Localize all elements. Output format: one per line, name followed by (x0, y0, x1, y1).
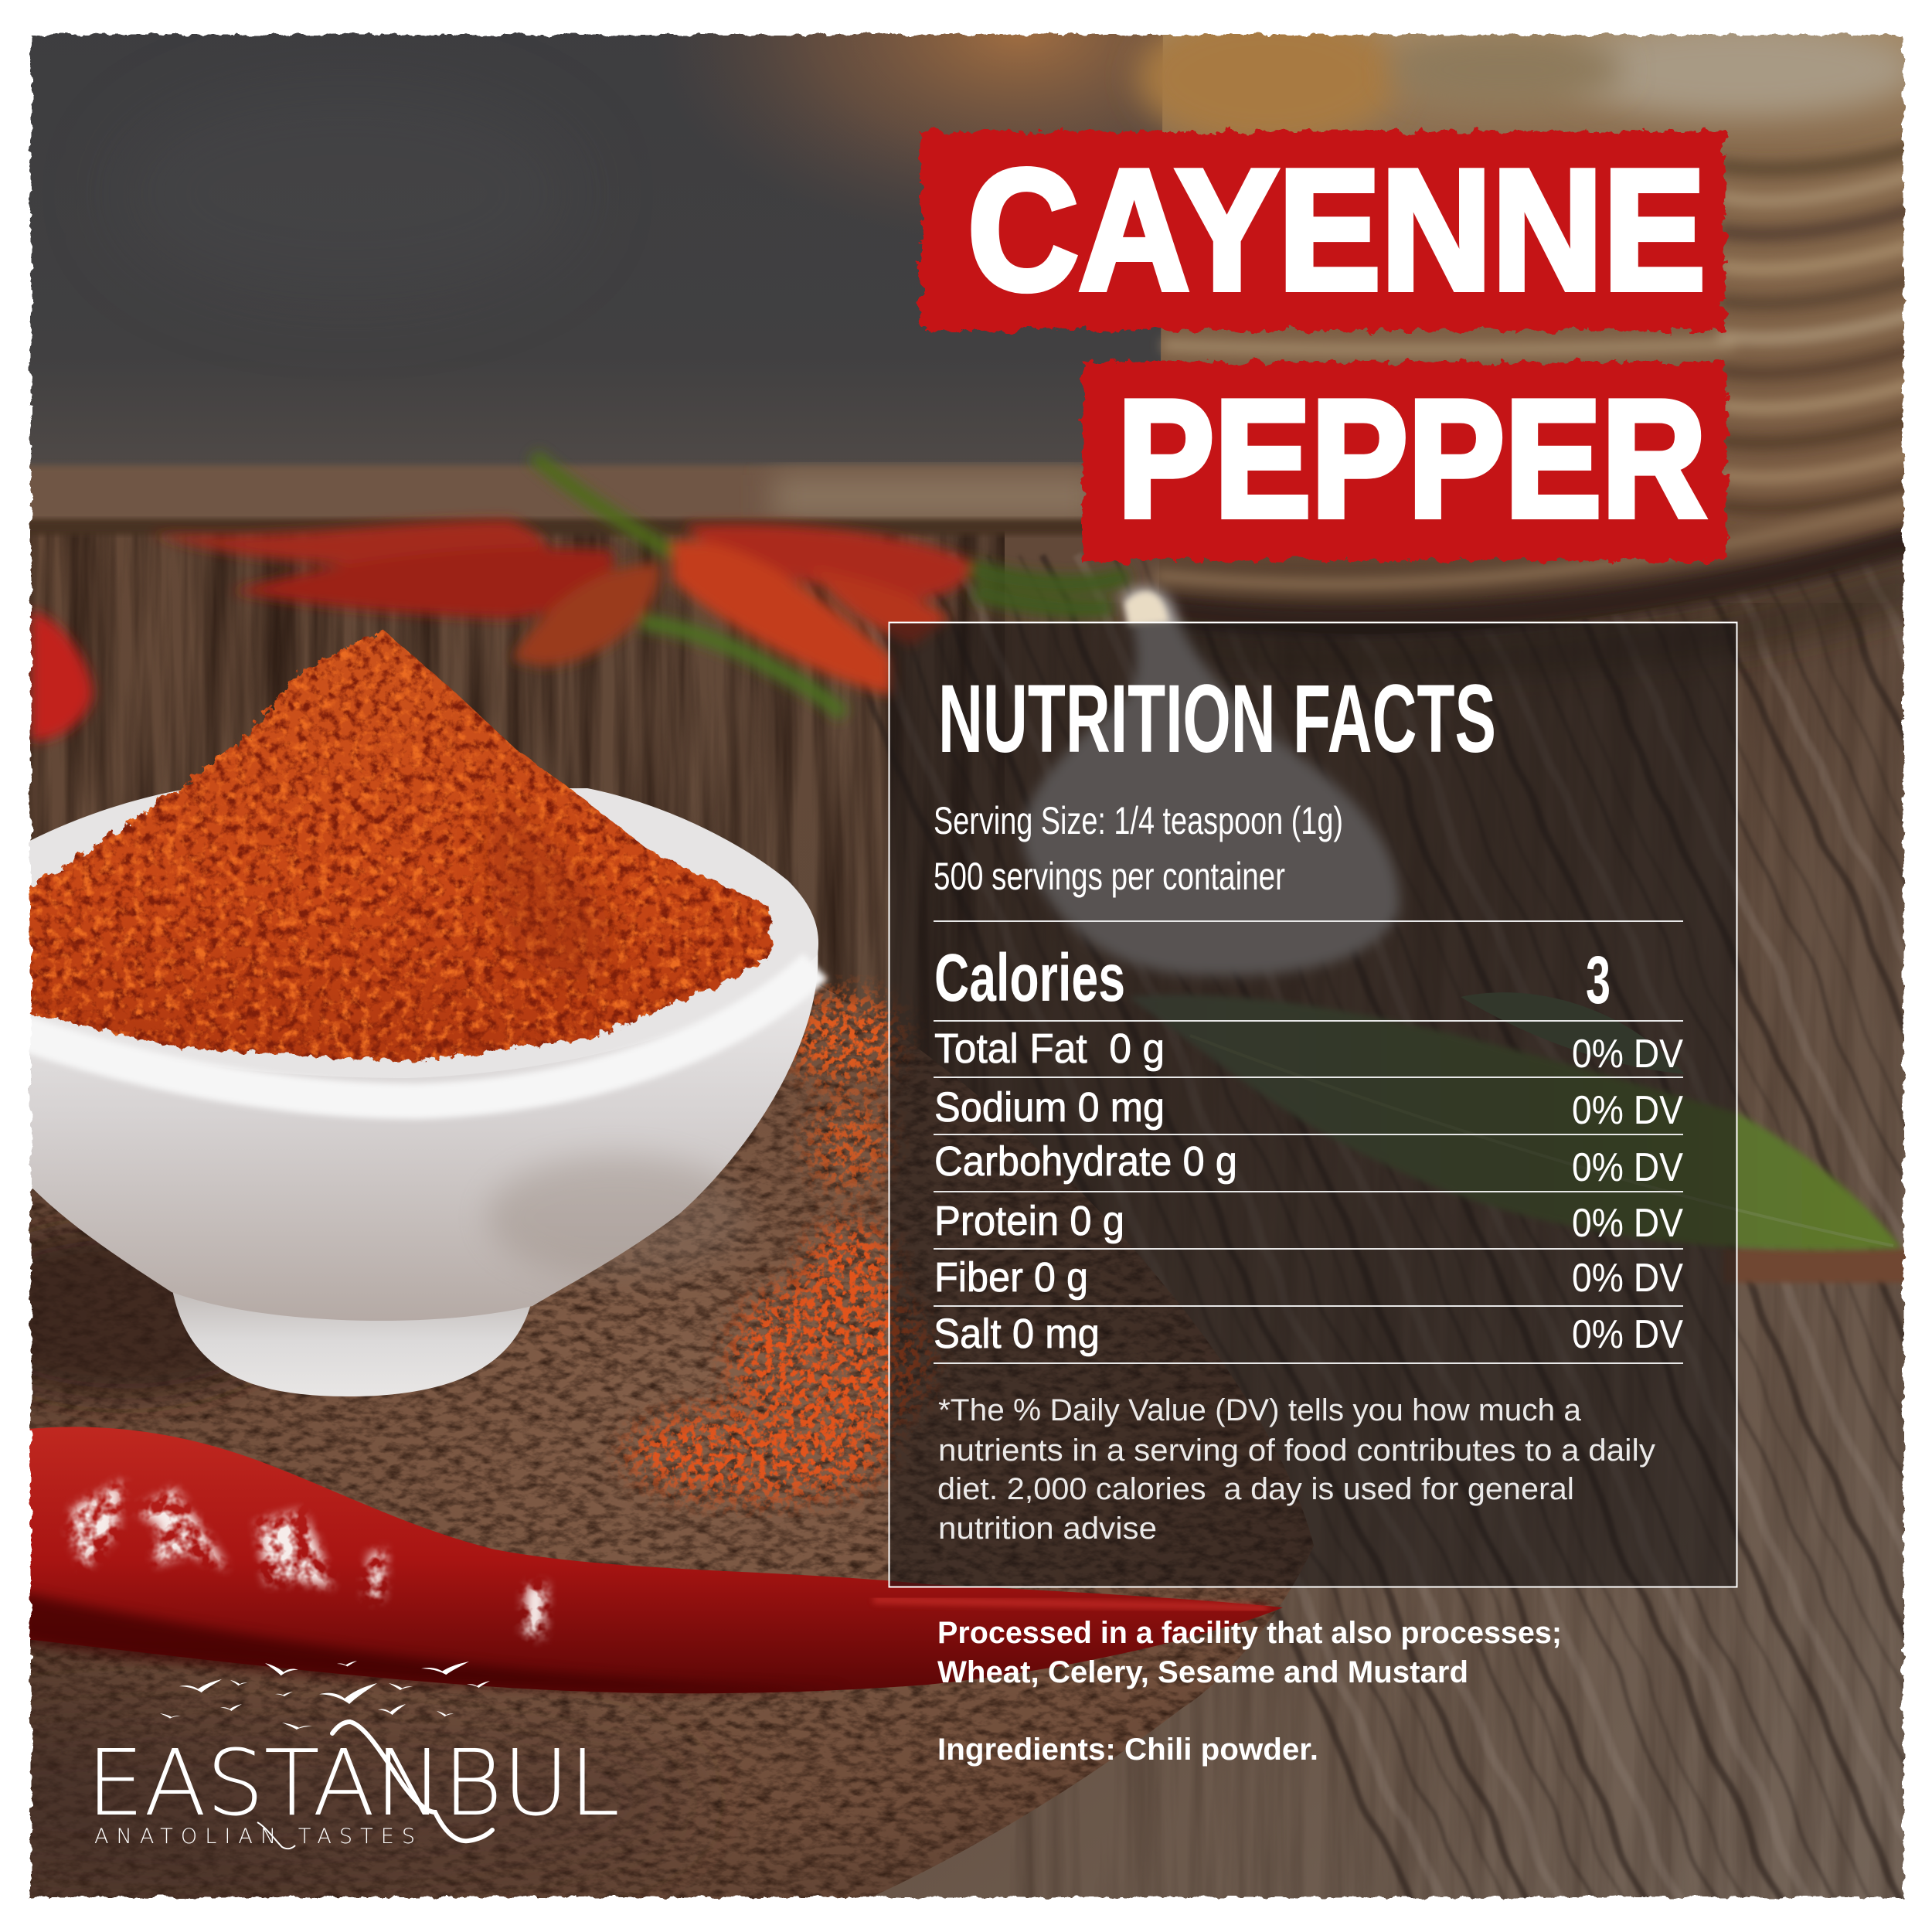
daily value footnote (937, 1393, 1655, 1546)
tagline swash (257, 1822, 295, 1849)
serving text (934, 799, 1343, 898)
wooden board (0, 980, 1314, 1909)
allergen and ingredients text (937, 1616, 1562, 1767)
nutrient rows: Salt 0 mg (934, 1311, 1100, 1357)
title: pepper: PEPPER (1117, 365, 1706, 552)
slate wall (0, 0, 1391, 475)
allergen and ingredients text: Ingredients: Chili powder. (937, 1733, 1318, 1767)
table wood (0, 495, 1932, 1932)
allergen and ingredients text: Wheat, Celery, Sesame and Mustard (937, 1655, 1468, 1689)
powder shading (488, 796, 610, 981)
tagline: ANATOLIAN TASTES (94, 1825, 415, 1849)
allergen and ingredients text: Processed in a facility that also processes; (937, 1616, 1562, 1650)
title banners (921, 131, 1726, 561)
top chilies (31, 456, 1128, 740)
daily value column: 0% DV (1572, 1145, 1683, 1190)
garlic bulb (1022, 587, 1399, 975)
daily value column: 0% DV (1572, 1201, 1683, 1246)
bowl body (19, 948, 818, 1321)
powder mound (19, 631, 772, 1062)
burlap strip (0, 465, 1105, 535)
banner: cayenne (921, 131, 1725, 331)
nutrient rows: Sodium 0 mg (934, 1084, 1165, 1131)
serving text: Serving Size: 1/4 teaspoon (1g) (934, 799, 1343, 842)
wicker basket (1136, 8, 1932, 678)
wordmark swash (332, 1722, 492, 1841)
logo: eastanbul (87, 1661, 620, 1849)
daily value column: 0% DV (1572, 1032, 1683, 1077)
title: cayenne: CAYENNE (968, 134, 1706, 326)
daily value footnote: nutrients in a serving of food contributes to a daily (938, 1434, 1655, 1468)
nutrient rows: Total Fat 0 g (934, 1026, 1165, 1072)
serving text: 500 servings per container (934, 855, 1285, 898)
daily value footnote: *The % Daily Value (DV) tells you how much a (938, 1393, 1582, 1427)
calories row: 3 (1586, 943, 1611, 1018)
calories row (934, 940, 1611, 1018)
bowl inner rim (19, 788, 818, 1078)
large red chili (19, 1427, 1283, 1693)
heading: NUTRITION FACTS (938, 665, 1496, 773)
nutrient rows (934, 1026, 1237, 1357)
spilled chili powder (626, 993, 931, 1499)
white bowl with chili powder (19, 631, 818, 1396)
bay leaves (1128, 992, 1901, 1250)
daily value column: 0% DV (1572, 1088, 1683, 1133)
daily value column (1572, 1032, 1683, 1357)
wordmark: EASTANBUL (87, 1730, 620, 1836)
daily value column: 0% DV (1572, 1256, 1683, 1301)
daily value footnote: diet. 2,000 calories a day is used for general (937, 1472, 1574, 1506)
daily value column: 0% DV (1572, 1312, 1683, 1357)
panel box (889, 623, 1737, 1587)
nutrient rows: Fiber 0 g (934, 1254, 1088, 1301)
divider lines (934, 921, 1683, 1363)
daily value footnote: nutrition advise (938, 1512, 1157, 1546)
calories row: Calories (934, 940, 1125, 1015)
panel: nutrition facts (889, 623, 1737, 1587)
icon: flock of birds (160, 1661, 490, 1730)
banner: pepper (1083, 362, 1726, 561)
bowl foot (172, 1286, 532, 1396)
nutrient rows: Protein 0 g (934, 1198, 1124, 1244)
nutrient rows: Carbohydrate 0 g (934, 1138, 1237, 1185)
